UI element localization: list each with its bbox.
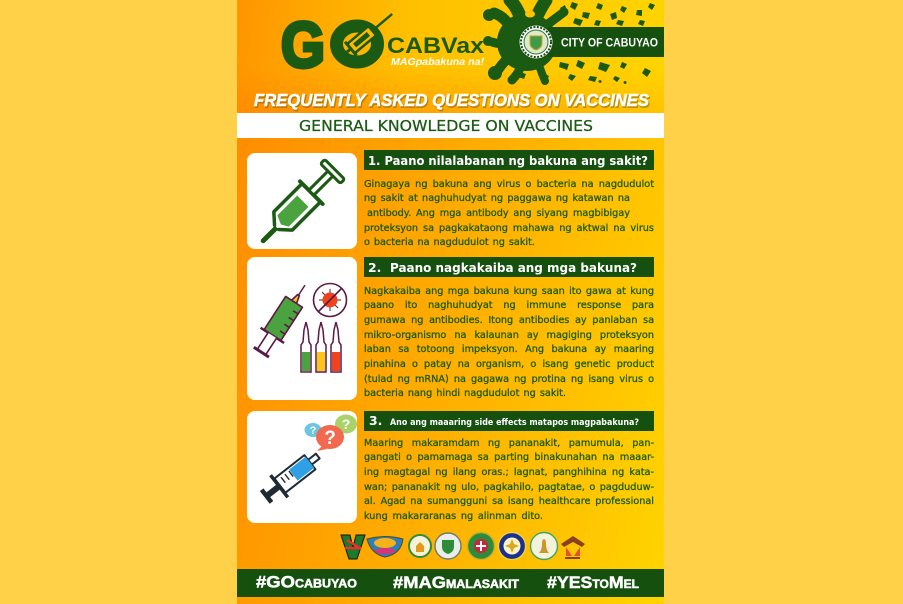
logo: GO CABVax: CABVax: [387, 33, 485, 58]
logo: VV: [341, 535, 365, 559]
question 2 header: 2.: [368, 260, 381, 275]
icon: question bubbles: ?: [324, 428, 336, 449]
text: wan; pananakit ng ulo, pagkahilo, pagtatae, o pagduduw-: [364, 482, 654, 493]
logo: GO CABVax: [281, 7, 485, 81]
question 2 header: [364, 257, 654, 277]
text: Nagkakaiba ang mga bakuna kung saan ito gawa at kung: [364, 286, 654, 297]
hashtag: YEStoMel: #YESTOMEL: [547, 573, 639, 592]
icon: question bubbles: [304, 414, 357, 451]
icon: vials: [301, 322, 341, 372]
icon: question bubbles: ?: [342, 416, 350, 432]
icon: syringe 2: [250, 277, 317, 360]
title: frequently asked questions: FREQUENTLY ASKED QUESTIONS ON VACCINES: [254, 90, 649, 110]
title: frequently asked questions: FREQUENTLY ASKED QUESTIONS ON VACCINES: [255, 92, 650, 112]
logo: round seal 2: [435, 533, 461, 559]
text: pinahina o patay na organism, o isang genetic product: [364, 359, 654, 370]
text: gumawa ng antibodies. Itong antibodies ay panlaban sa: [364, 315, 654, 326]
icon: logo syringe: [336, 7, 398, 63]
logo: round seal 3: [468, 532, 494, 560]
logo: GO CABVax: MAGpabakuna na!: [391, 56, 484, 68]
question 3 header: Ano ang maaaring side effects matapos magpabakuna?: [390, 418, 639, 428]
logo: GO CABVax: G: [281, 9, 325, 81]
text: ng sakit at naghuhudyat ng paggawa ng katawan na: [364, 193, 630, 204]
text: kung makararanas ng alinman dito.: [364, 511, 543, 522]
text: proteksyon sa pagkakataong mahawa ng aktwal na virus: [364, 223, 654, 234]
heading band: general knowledge: [237, 113, 664, 138]
city banner: CITY OF CABUYAO: [561, 36, 658, 50]
card: syringe icon 1: [247, 153, 357, 249]
logo: round seal 1: [409, 535, 431, 557]
question 3 header: [364, 411, 654, 431]
answer 1 text: [364, 179, 654, 248]
text: o bacteria na nagdudulot ng sakit.: [364, 237, 535, 248]
icon: syringe 3: [258, 445, 326, 507]
card: blue syringe icon: [247, 411, 357, 523]
text: al. Agad na sumangguni sa isang healthcare professional: [364, 496, 654, 507]
text: Maaring makaramdam ng pananakit, pamumula, pan-: [364, 438, 654, 449]
question 2 header: Paano nagkakaiba ang mga bakuna?: [390, 260, 637, 275]
logo: round seal 5: [530, 532, 558, 560]
question 1 header: 1. Paano nilalabanan ng bakuna ang sakit?: [368, 153, 648, 168]
text: (tulad ng mRNA) na gagawa ng protina ng isang virus o: [364, 374, 654, 385]
text: bacteria nang hindi nagdudulot ng sakit.: [364, 388, 566, 399]
hashtag: MAGmalasakit: #MAG MALASAKIT: [393, 573, 519, 592]
city seal: [519, 25, 553, 59]
text: gangati o pamamaga sa parting binakunahan na maaar-: [364, 452, 654, 463]
text: ing magtagal ng ilang oras.; lagnat, panghihina ng kata-: [364, 467, 654, 478]
text: Ginagaya ng bakuna ang virus o bacteria na nagdudulot: [364, 179, 654, 190]
text: paano ito naghuhudyat ng immune response para: [364, 300, 654, 311]
icon: question bubbles: ?: [310, 425, 317, 437]
card: syringe and vials icon: [247, 257, 357, 400]
text: mikro-organismo na kalaunan ay magiging proteksyon: [364, 330, 654, 341]
footer hashtag band: [237, 569, 664, 597]
logo: BAVANICA: [561, 536, 585, 559]
logo: round seal 4: [498, 532, 526, 560]
icon: crossed virus: [314, 284, 346, 316]
text: laban sa totoong impeksyon. Ang bakuna ay maaring: [364, 344, 654, 355]
question 3 header: 3.: [369, 413, 382, 428]
text: antibody. Ang mga antibody ang siyang magbibigay: [367, 208, 630, 219]
answer 3 text: [364, 438, 654, 522]
hashtag: GOcabuyao: #GO CABUYAO: [256, 572, 357, 592]
virus splash: [483, 0, 655, 84]
heading band: general knowledge: GENERAL KNOWLEDGE ON VACCINES: [299, 117, 593, 135]
poster background: [237, 0, 664, 604]
answer 2 text: [364, 286, 654, 399]
logo: mask: [367, 536, 403, 557]
city banner: [548, 27, 664, 57]
